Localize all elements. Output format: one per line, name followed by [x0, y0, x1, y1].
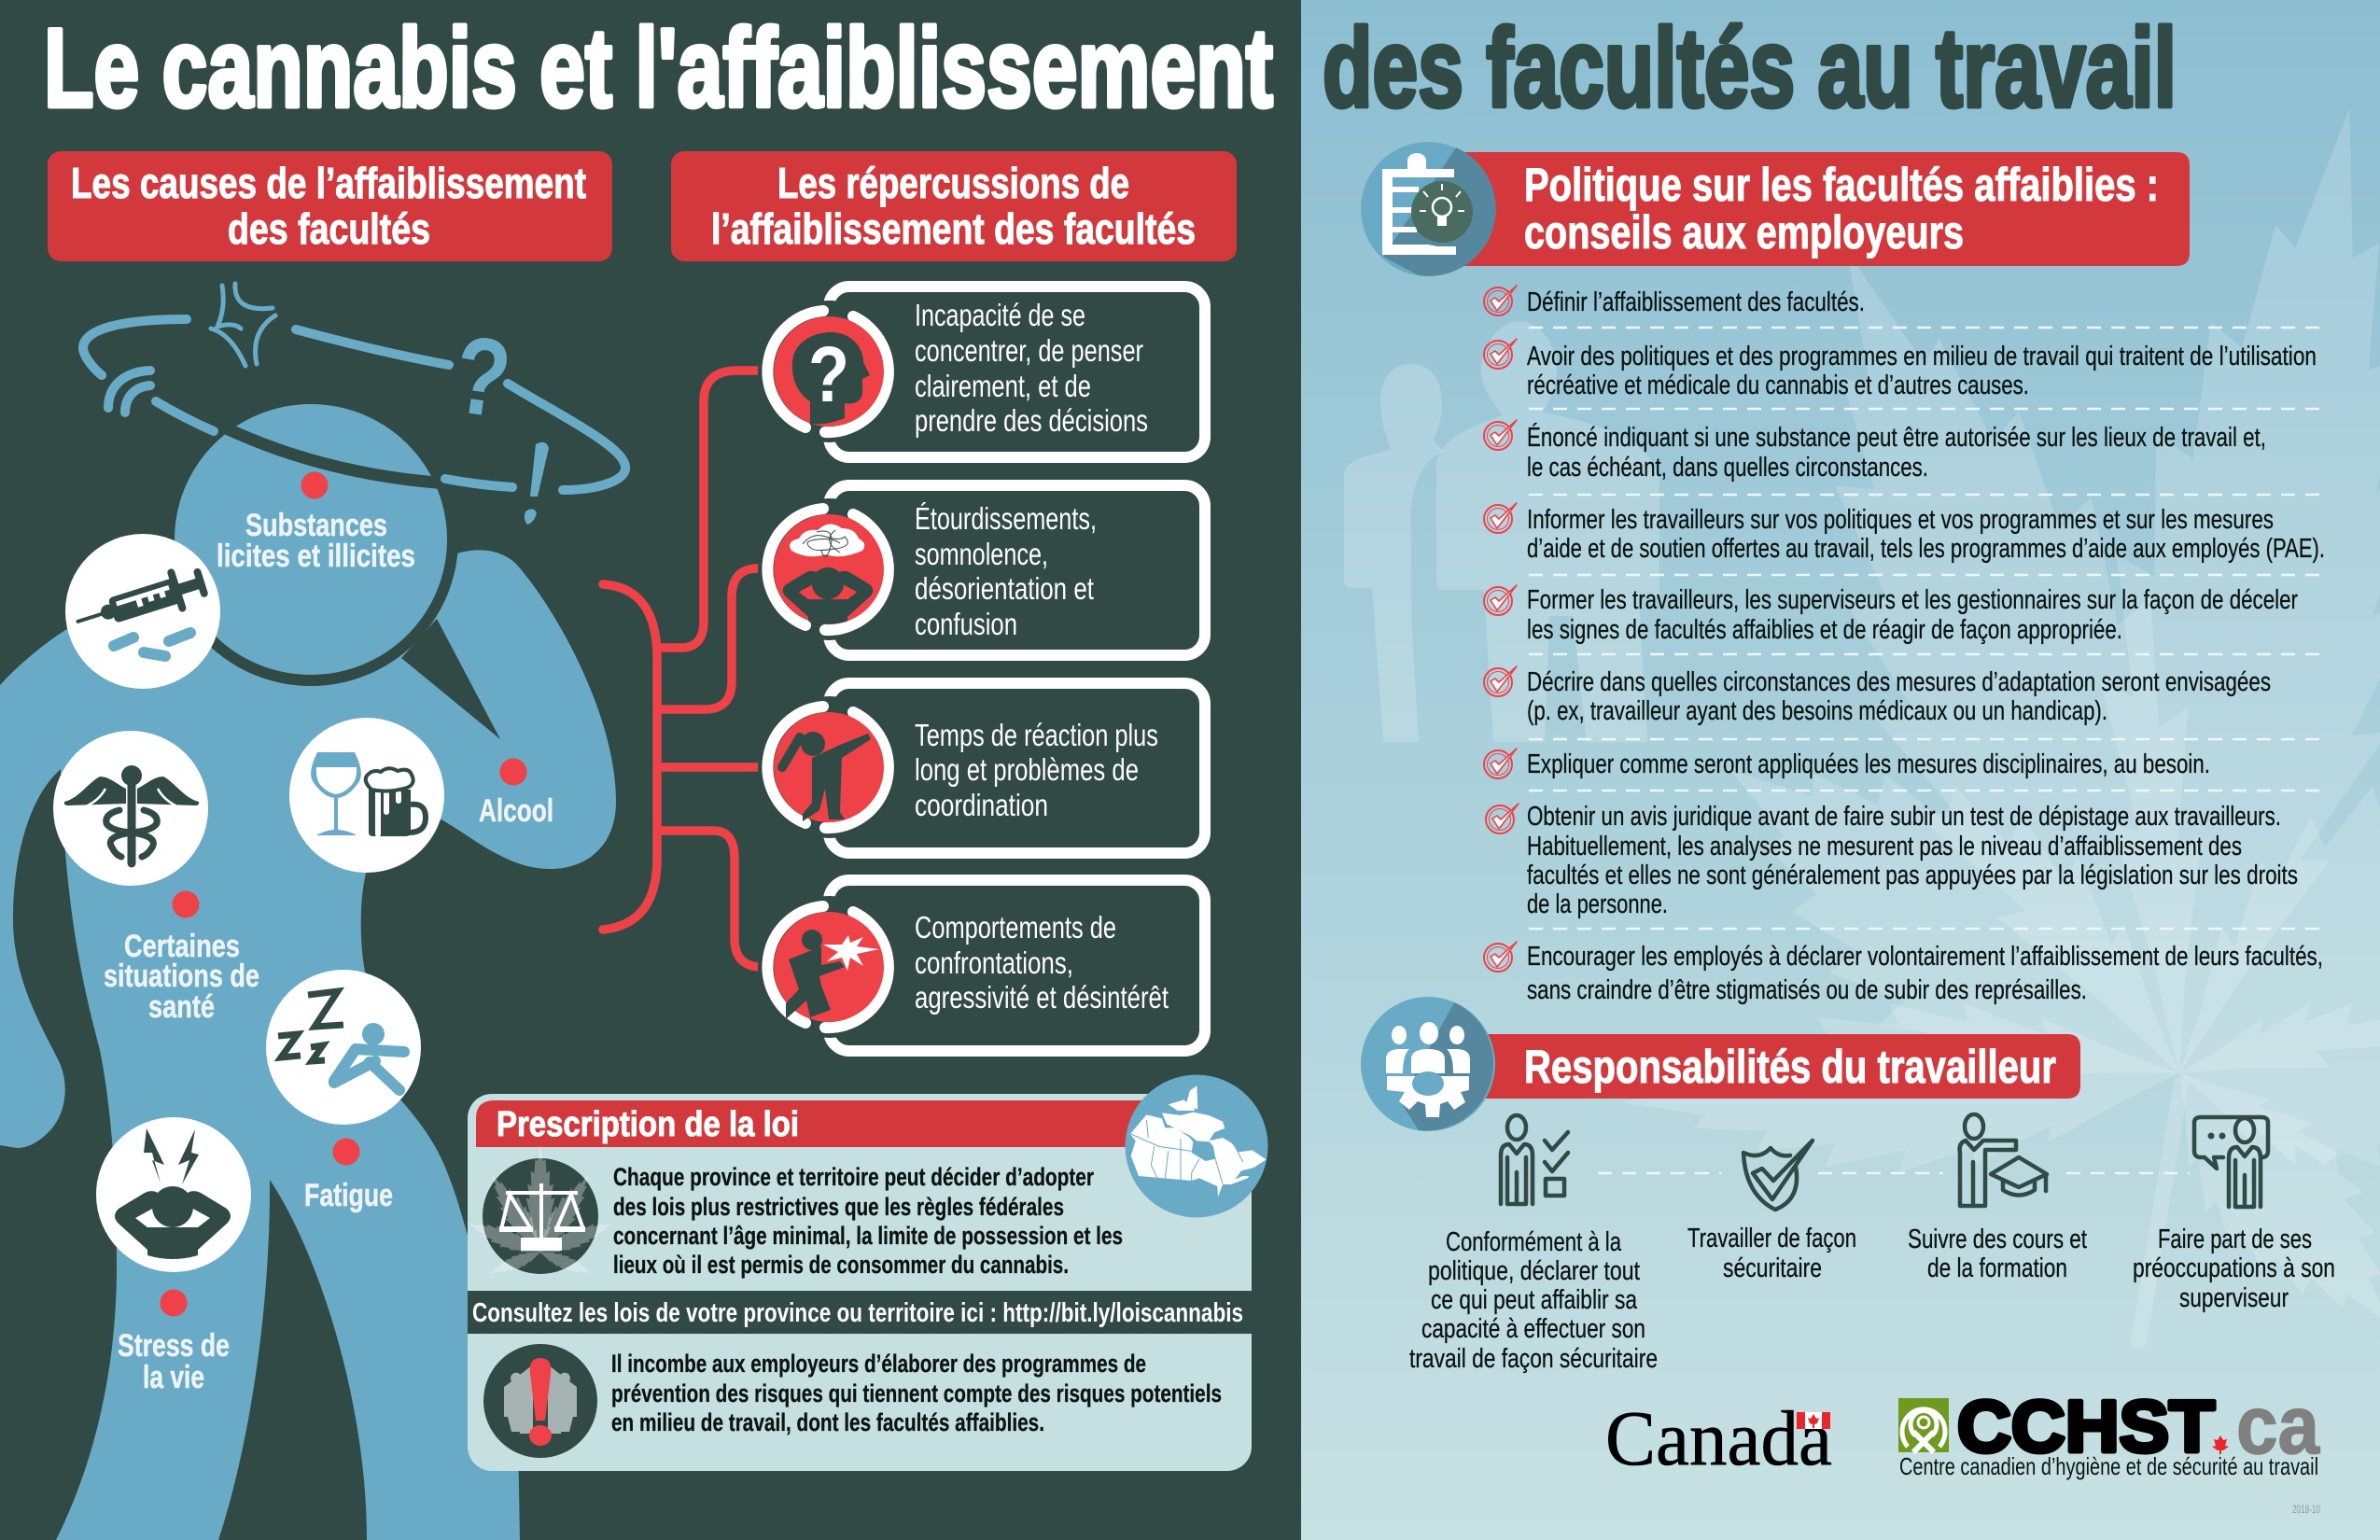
panel: legal requirements: en milieu de travail, dont les facultés affaiblies.: [611, 1408, 1044, 1436]
cause: stress: Stress de: [118, 1328, 230, 1364]
item 6: [1484, 666, 2271, 726]
cause: health: Certaines: [124, 929, 240, 964]
icon: shield with checkmark: [1743, 1141, 1813, 1210]
card: concentration: clairement, et de: [915, 369, 1091, 403]
cause: fatigue: [304, 1139, 393, 1213]
heading: policy: [1456, 152, 2190, 266]
logo: CCHST: [1898, 1379, 2320, 1480]
title left: Le cannabis et l'affaiblissement: [44, 6, 1273, 131]
item 3: le cas échéant, dans quelles circonstances.: [1527, 453, 1928, 483]
card: aggression: Comportements de: [915, 910, 1116, 945]
icon: punching person and burst: [786, 930, 879, 1019]
card: concentration: prendre des décisions: [915, 403, 1148, 438]
responsibility: work safely: [1687, 1141, 1856, 1283]
icon: syringe and pills: [65, 534, 220, 689]
card: reaction time: coordination: [915, 788, 1048, 822]
card: aggression: agressivité et désintérêt: [915, 980, 1169, 1015]
heading: policy: Politique sur les facultés affaiblies :: [1524, 159, 2159, 211]
dizziness halo with symbols: [83, 284, 625, 525]
icon: wine and beer: [289, 718, 444, 873]
icon: sleeping person: [266, 970, 421, 1125]
responsibility: comply and report: [1409, 1115, 1658, 1374]
heading: policy: conseils aux employeurs: [1524, 206, 1964, 259]
responsibility: comply and report: politique, déclarer tout: [1428, 1256, 1640, 1286]
item 1: Définir l’affaiblissement des facultés.: [1527, 287, 1865, 317]
icon: staggering person: [782, 732, 871, 821]
heading: worker responsibilities: [1484, 1034, 2080, 1099]
date code: 2018-10: [2292, 1503, 2320, 1516]
cause: fatigue: Fatigue: [304, 1178, 393, 1213]
responsibility connector dashes: [1598, 1172, 2190, 1174]
logo: CCHST: CCHST: [1957, 1385, 2215, 1467]
cause: alcohol: Alcool: [479, 793, 553, 829]
checklist: [1484, 286, 2327, 1005]
item 8: de la personne.: [1527, 889, 1668, 919]
connectors: [603, 371, 763, 967]
icon: map of Canada: [1126, 1075, 1267, 1217]
cause: stress: la vie: [143, 1360, 204, 1395]
responsibility: comply and report: Conformément à la: [1446, 1227, 1622, 1257]
card: dizziness: [758, 485, 1205, 655]
card: concentration: [758, 287, 1205, 457]
responsibility: comply and report: travail de façon sécuritaire: [1409, 1344, 1658, 1374]
cause: health: santé: [148, 989, 215, 1025]
responsibility: work safely: Travailler de façon: [1687, 1224, 1856, 1253]
responsibility: raise concerns: Faire part de ses: [2158, 1225, 2312, 1254]
responsibility: raise concerns: superviseur: [2179, 1283, 2289, 1313]
panel: legal requirements: Il incombe aux employeurs d’élaborer des programmes de: [611, 1350, 1146, 1378]
card: dizziness: Étourdissements,: [915, 501, 1097, 536]
heading: causes: des facultés: [228, 204, 430, 253]
card: dizziness: désorientation et: [915, 571, 1094, 606]
exclamation mark: [525, 442, 549, 525]
heading: repercussions: l’affaiblissement des facultés: [711, 204, 1196, 253]
responsibility: comply and report: ce qui peut affaiblir sa: [1431, 1285, 1638, 1315]
card: concentration: concentrer, de penser: [915, 333, 1143, 368]
panel: legal requirements: des lois plus restrictives que les règles fédérales: [613, 1193, 1064, 1221]
item 8: [1486, 802, 2298, 919]
card: dizziness: confusion: [915, 607, 1017, 641]
logo: Canada wordmark: Canada: [1605, 1395, 1832, 1482]
heading: law: Prescription de la loi: [497, 1105, 799, 1144]
responsibility: training: [1908, 1114, 2087, 1283]
item 9: [1484, 942, 2323, 1005]
responsibility: training: Suivre des cours et: [1908, 1225, 2087, 1254]
responsibility: comply and report: capacité à effectuer son: [1421, 1314, 1645, 1344]
icon: scales of justice: [463, 1145, 618, 1281]
item 1: [1484, 286, 1865, 317]
card: dizziness: somnolence,: [915, 537, 1048, 571]
heading: repercussions: Les répercussions de: [777, 159, 1129, 207]
item 6: (p. ex, travailleur ayant des besoins médicaux ou un handicap).: [1527, 696, 2107, 726]
icon: confused head with cloud: [783, 524, 873, 624]
link bar: [468, 1291, 1252, 1334]
cause: stress: [118, 1290, 230, 1395]
panel: legal requirements: prévention des risques qui tiennent compte des risques potentiels: [611, 1379, 1222, 1407]
icon: head with question mark: ?: [808, 330, 849, 418]
cause: health: situations de: [104, 959, 259, 994]
background silhouettes of workers: [1344, 321, 1659, 742]
panel: legal requirements: Chaque province et territoire peut décider d’adopter: [613, 1163, 1094, 1191]
item 5: les signes de facultés affaiblies et de réagir de façon appropriée.: [1527, 615, 2122, 645]
body figure: [0, 393, 616, 1540]
left dark background panel: [0, 0, 1301, 1540]
cause: alcohol: [479, 758, 553, 829]
item 5: [1484, 585, 2298, 645]
item 2: [1484, 339, 2317, 400]
question mark: ?: [447, 313, 518, 442]
card: reaction time: long et problèmes de: [915, 752, 1139, 787]
icon: workers with warning: [483, 1344, 597, 1458]
panel: legal requirements: [463, 1094, 1252, 1471]
right blue background panel: [1301, 0, 2380, 1540]
heading: causes: Les causes de l’affaiblissement: [71, 159, 586, 207]
heading: repercussions: [671, 151, 1237, 261]
background cannabis leaf: [1616, 82, 2380, 1370]
icon: head with question mark: [792, 330, 870, 424]
heading: law: [476, 1100, 1204, 1147]
logo: CCHST: ca: [2236, 1379, 2320, 1471]
card: aggression: [758, 880, 1205, 1051]
responsibility: training: de la formation: [1927, 1253, 2067, 1283]
card: aggression: confrontations,: [915, 945, 1073, 980]
cause: substances: [217, 472, 415, 574]
icon: person with speech bubble: [2194, 1117, 2268, 1207]
icon: clipboard with light bulb: [1361, 142, 1496, 276]
icon: team with gear: [1361, 997, 1495, 1131]
card: reaction time: [758, 683, 1205, 853]
cause: substances: licites et illicites: [217, 539, 415, 574]
icon: person with checklist: [1501, 1115, 1568, 1204]
cause: substances: Substances: [245, 508, 387, 543]
heading: causes: [48, 151, 612, 261]
link bar: Consultez les lois de votre province ou territoire ici : http://bit.ly/loiscannabis: [472, 1298, 1243, 1328]
icon: person with graduation cap: [1960, 1114, 2047, 1206]
card: concentration: Incapacité de se: [915, 298, 1085, 332]
responsibility: work safely: sécuritaire: [1723, 1253, 1822, 1283]
item 4: [1484, 503, 2325, 564]
item 2: récréative et médicale du cannabis et d’autres causes.: [1527, 371, 2029, 400]
icon: stress headache: [96, 1117, 251, 1272]
panel: legal requirements: concernant l’âge minimal, la limite de possession et les: [613, 1222, 1123, 1250]
item 3: [1484, 420, 2266, 483]
card: reaction time: Temps de réaction plus: [915, 718, 1158, 752]
icon: caduceus: [53, 731, 208, 886]
panel: legal requirements: lieux où il est permis de consommer du cannabis.: [613, 1251, 1069, 1279]
heading: worker responsibilities: Responsabilités du travailleur: [1524, 1041, 2056, 1093]
item 9: sans craindre d’être stigmatisés ou de subir des représailles.: [1527, 975, 2087, 1005]
cause: health: [104, 890, 259, 1025]
responsibility: raise concerns: [2133, 1117, 2335, 1313]
